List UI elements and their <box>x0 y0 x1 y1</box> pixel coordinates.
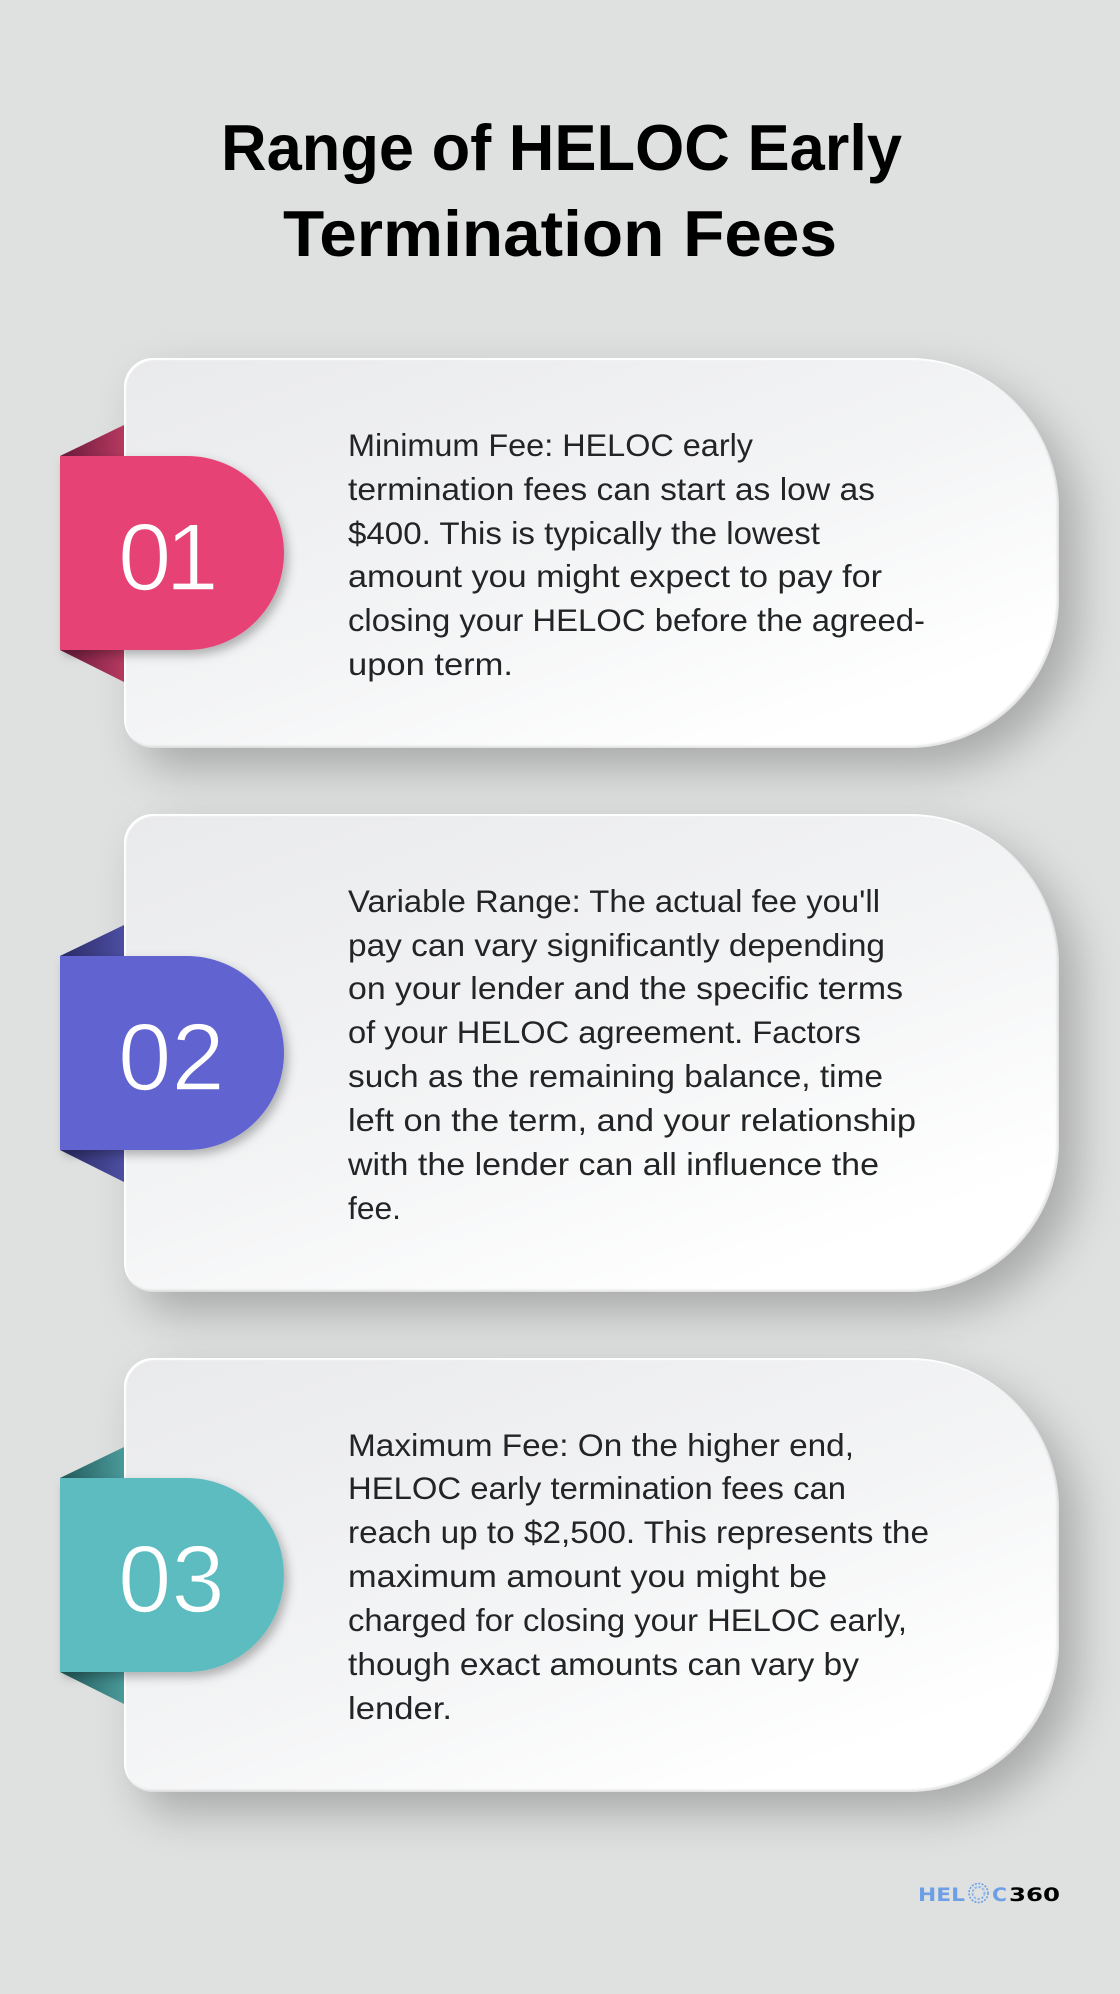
text: minimum fee: amount you might expect to pay for <box>348 558 882 594</box>
text: maximum fee: reach up to $2,500. This represents the <box>348 1514 929 1550</box>
title <box>221 111 902 270</box>
number badge 01: 01 <box>118 504 219 611</box>
text: variable range: with the lender can all influence the <box>347 1146 879 1182</box>
logo: HELOC360: HEL <box>918 1884 965 1906</box>
text: minimum fee: termination fees can start as low as <box>348 471 875 507</box>
logo: HELOC360: C <box>992 1884 1007 1906</box>
text: variable range: such as the remaining balance, time <box>348 1058 883 1094</box>
text: variable range <box>347 883 916 1226</box>
text: minimum fee <box>348 427 925 682</box>
text: variable range: pay can vary significantly depending <box>348 927 885 963</box>
logo: HELOC360 <box>918 1882 1060 1906</box>
logo: HELOC360: 360 <box>1009 1884 1060 1906</box>
card background <box>124 814 1059 1292</box>
card background <box>124 358 1059 748</box>
text: minimum fee: Minimum Fee: HELOC early <box>348 427 753 463</box>
panel: minimum fee <box>58 356 1099 790</box>
card background <box>124 1358 1059 1792</box>
panel: variable range <box>58 812 1099 1334</box>
title: Termination Fees <box>283 197 837 270</box>
number badge 02: 02 <box>118 1004 225 1111</box>
number badge 01 <box>58 425 294 682</box>
text: variable range: of your HELOC agreement. Factors <box>348 1014 861 1050</box>
text: maximum fee: charged for closing your HELOC early, <box>348 1602 907 1638</box>
text: maximum fee: lender. <box>348 1690 452 1726</box>
text: variable range: on your lender and the specific terms <box>348 970 903 1006</box>
text: minimum fee: $400. This is typically the lowest <box>348 515 820 551</box>
text: maximum fee: HELOC early termination fees can <box>348 1470 846 1506</box>
text: maximum fee: Maximum Fee: On the higher end, <box>348 1427 854 1463</box>
text: maximum fee: though exact amounts can vary by <box>348 1646 859 1682</box>
text: minimum fee: upon term. <box>348 646 513 682</box>
panel: maximum fee <box>58 1356 1099 1834</box>
text: minimum fee: closing your HELOC before the agreed- <box>348 602 925 638</box>
number badge 03: 03 <box>118 1526 225 1633</box>
title: Range of HELOC Early <box>221 111 902 184</box>
number badge 02 <box>58 925 294 1182</box>
text: maximum fee <box>348 1427 929 1726</box>
text: maximum fee: maximum amount you might be <box>348 1558 827 1594</box>
text: variable range: left on the term, and your relationship <box>348 1102 916 1138</box>
text: variable range: Variable Range: The actual fee you'll <box>348 883 880 919</box>
text: variable range: fee. <box>348 1190 401 1226</box>
